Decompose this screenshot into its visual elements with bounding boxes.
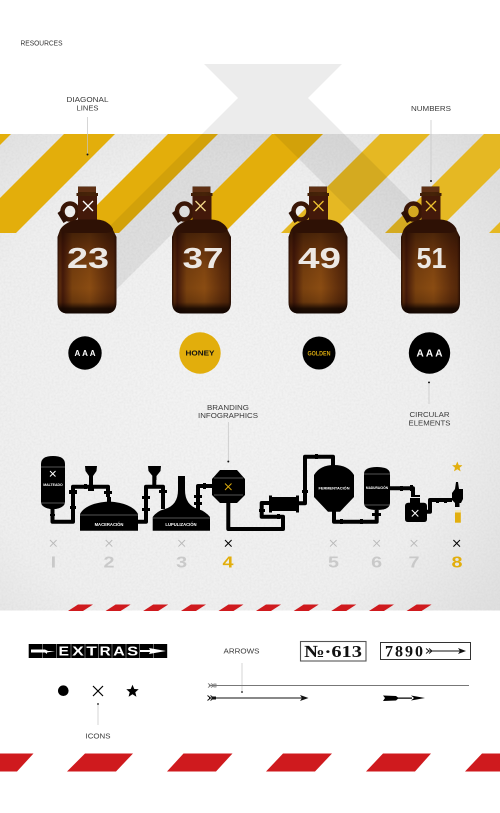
- circle: AAA small: [68, 336, 102, 370]
- icon: circle: [58, 685, 69, 696]
- extras banner: S: [127, 644, 139, 659]
- label: circular elements: ELEMENTS: [408, 418, 450, 428]
- label: arrows: ARROWS: [224, 646, 260, 656]
- step markers and numbers: 4: [222, 554, 234, 572]
- label: diagonal lines: [66, 95, 108, 156]
- pipes: [48, 454, 452, 529]
- red stripe border: top: [68, 604, 432, 611]
- extras banner: A: [113, 644, 125, 659]
- step markers and numbers: 7: [408, 554, 420, 572]
- step markers and numbers: 2: [104, 554, 115, 572]
- label: circular elements: CIRCULAR: [410, 410, 450, 419]
- extras banner: X: [72, 644, 84, 659]
- bottle 23: 23: [67, 243, 109, 275]
- label: diagonal lines: DIAGONAL: [66, 95, 108, 104]
- circle: honey: HONEY: [186, 349, 214, 358]
- star: gold: [452, 462, 462, 471]
- label: circular elements: [408, 382, 450, 428]
- arrow: long grey line: [208, 684, 469, 688]
- tank 5: fermentacion: FERMENTACIÓN: [318, 486, 350, 490]
- circle: AAA small: AAA: [74, 349, 96, 358]
- circle: golden: [302, 336, 336, 370]
- brewing process diagram: [41, 454, 463, 531]
- circle: AAA large: [409, 332, 450, 374]
- tank 1: malteado: [41, 456, 65, 509]
- bottle 49: [288, 186, 348, 314]
- kettle 3: lupulizacion: LUPULIZACIÓN: [165, 522, 197, 527]
- red stripe border: bottom: [0, 754, 500, 772]
- circle: AAA large: AAA: [416, 349, 442, 360]
- funnel 2: [148, 466, 161, 480]
- bottle 49: 49: [298, 243, 341, 275]
- tank 6: maduracion: MADURACIÓN: [366, 485, 389, 490]
- box: number 7890 with arrow: 7890: [385, 644, 423, 660]
- bottle 51: [401, 186, 460, 314]
- extras banner: R: [100, 644, 111, 659]
- label: branding infographics: BRANDING: [207, 403, 249, 412]
- box: number 7890 with arrow: [380, 642, 470, 660]
- arrow: long black: [208, 695, 308, 701]
- label: branding infographics: [198, 403, 258, 462]
- label: diagonal lines: LINES: [76, 104, 98, 112]
- step markers and numbers: 5: [328, 554, 339, 572]
- panel: textured background: [0, 134, 500, 610]
- label: icons: [86, 703, 110, 740]
- label: icons: ICONS: [86, 732, 110, 740]
- bottle 51: 51: [416, 243, 447, 275]
- label: arrows: [224, 646, 260, 693]
- kettle 3: lupulizacion: [153, 476, 210, 531]
- step markers and numbers: 3: [176, 554, 187, 572]
- extras banner: [29, 644, 167, 659]
- cooler device: [269, 496, 299, 512]
- icon: x mark: [93, 686, 103, 696]
- funnel 1: [85, 466, 97, 480]
- kettle 2: maceracion: [80, 497, 138, 531]
- kettle 2: maceracion: MACERACIÓN: [95, 522, 123, 527]
- tank 6: maduracion: [364, 467, 390, 510]
- tank 1: malteado: MALTEADO: [43, 483, 63, 487]
- circle: honey: [179, 332, 221, 374]
- extras banner: T: [86, 644, 97, 659]
- tank 4: [212, 470, 245, 503]
- bottle 37: 37: [182, 243, 224, 275]
- crossed grey bands: [100, 64, 461, 306]
- tank 5: fermentacion: [314, 465, 354, 512]
- label: numbers: [411, 104, 451, 182]
- bottle 23: [58, 186, 116, 314]
- box: number 613: №·613: [304, 642, 362, 661]
- bottle 37: [172, 186, 231, 314]
- label: branding infographics: INFOGRAPHICS: [198, 411, 258, 420]
- label: numbers: NUMBERS: [411, 104, 451, 113]
- step markers and numbers: 6: [371, 554, 382, 572]
- beer glass: [455, 510, 461, 523]
- icon: star: [126, 685, 139, 697]
- box 7: [405, 498, 427, 522]
- step markers and numbers: 8: [452, 554, 463, 572]
- step markers and numbers: [50, 540, 463, 572]
- diagonal yellow stripes: [0, 134, 500, 233]
- arrow: short bold: [383, 696, 425, 701]
- circle: golden: GOLDEN: [308, 351, 330, 357]
- extras banner: E: [59, 644, 69, 659]
- beer tap: [452, 482, 463, 507]
- label: resources: RESOURCES: [20, 40, 63, 48]
